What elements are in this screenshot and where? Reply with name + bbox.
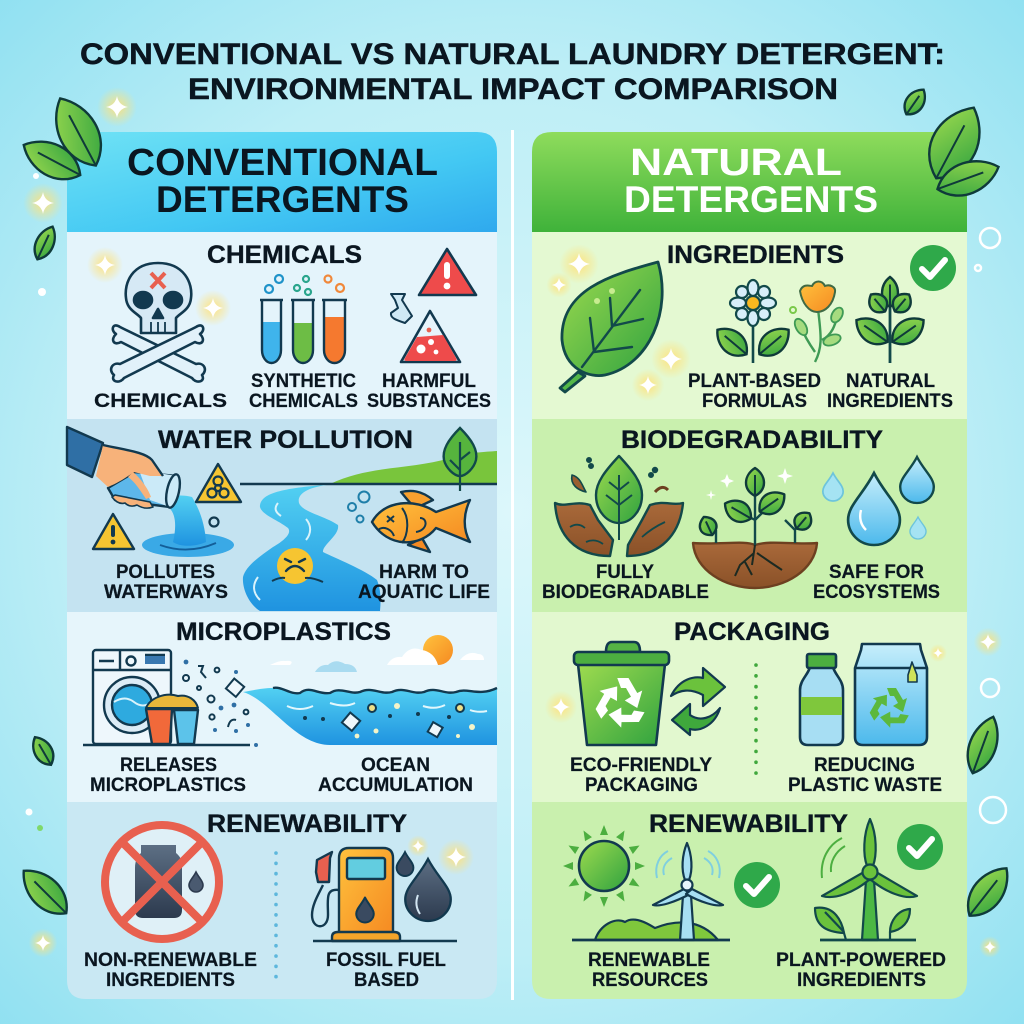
header: natural detergents: NATURAL (630, 142, 842, 184)
sparkles (546, 244, 691, 401)
label: eco-friendly packaging: PACKAGING (585, 775, 698, 796)
icon: biohazard sign (196, 464, 241, 502)
icon: recycling bin (574, 642, 669, 745)
label: pollutes waterways: WATERWAYS (104, 582, 228, 603)
label: ocean accumulation: OCEAN (361, 755, 430, 776)
label: natural ingredients (827, 371, 953, 412)
title: ENVIRONMENTAL IMPACT COMPARISON (188, 73, 838, 106)
heading: renewability: RENEWABILITY (649, 810, 848, 838)
label: non-renewable ingredients: NON-RENEWABLE (84, 950, 257, 971)
icon: no oil barrel (104, 824, 220, 940)
label: fully biodegradable: BIODEGRADABLE (542, 582, 709, 603)
label: eco-friendly packaging (570, 755, 712, 796)
label: harm to aquatic life: AQUATIC LIFE (358, 582, 490, 603)
icon: hill and wind turbine (572, 843, 730, 940)
icon: hand pouring detergent (67, 427, 182, 509)
label: plant-powered ingredients (776, 950, 946, 991)
section: water pollution (67, 426, 497, 611)
heading: biodegradability: BIODEGRADABILITY (621, 426, 883, 454)
header: natural detergents (532, 132, 967, 232)
header: natural detergents: DETERGENTS (624, 179, 878, 220)
section: renewability (conventional) (84, 810, 474, 991)
icon: flask (391, 294, 460, 362)
label: fully biodegradable: FULLY (596, 562, 654, 583)
icon: water drops (823, 457, 934, 545)
icon: carton with recycling symbol (855, 644, 927, 745)
heading: packaging: PACKAGING (674, 618, 830, 646)
header: conventional detergents: DETERGENTS (156, 179, 409, 220)
icon: sprout in soil (693, 468, 817, 588)
title: CONVENTIONAL VS NATURAL LAUNDRY DETERGENT: (80, 38, 945, 71)
label: natural ingredients: INGREDIENTS (827, 391, 953, 412)
label: eco-friendly packaging: ECO-FRIENDLY (570, 755, 712, 776)
icon: check (734, 862, 780, 908)
label: pollutes waterways: POLLUTES (116, 562, 215, 583)
heading: chemicals: CHEMICALS (207, 241, 362, 269)
label: non-renewable ingredients (84, 950, 257, 991)
icon: green plant (850, 277, 930, 363)
sparkles (87, 247, 231, 326)
icon: large leaf (560, 262, 662, 392)
dotted divider (754, 665, 758, 776)
label: harmful substances (367, 371, 491, 412)
icon: warning triangle (419, 249, 476, 295)
icon: dead fish (348, 491, 470, 552)
heading: water pollution: WATER POLLUTION (158, 426, 413, 454)
section: microplastics (83, 618, 497, 796)
icon: sad face (272, 548, 323, 584)
section: ingredients (546, 241, 956, 412)
label: synthetic chemicals (249, 371, 358, 412)
landscape: horizon, hill and tree (240, 428, 497, 491)
label: non-renewable ingredients: INGREDIENTS (106, 970, 235, 991)
icon: skull and crossbones (111, 263, 205, 382)
label: harmful substances: SUBSTANCES (367, 391, 491, 412)
label: fossil fuel based (326, 950, 446, 991)
icon: washing machine with baskets (83, 650, 250, 745)
label: safe for ecosystems: SAFE FOR (829, 562, 924, 583)
icon: green sun (563, 825, 645, 907)
icon: oil drops (397, 835, 474, 921)
icon: warning sign (93, 514, 134, 549)
panel background: natural (532, 232, 967, 999)
section: packaging (545, 618, 947, 796)
section: renewability (natural) (563, 810, 946, 991)
icon: plant-powered turbine (815, 819, 917, 940)
label: fossil fuel based: FOSSIL FUEL (326, 950, 446, 971)
icon: fuel pump (312, 848, 457, 941)
label: plant-based formulas (688, 371, 821, 412)
label: natural ingredients: NATURAL (846, 371, 935, 392)
icon: leaf breaking soil (555, 456, 683, 556)
label: plant-based formulas: FORMULAS (702, 391, 807, 412)
panel: conventional detergents (67, 132, 497, 999)
section: chemicals (87, 241, 491, 412)
label: renewable resources: RESOURCES (592, 970, 708, 991)
panel: natural detergents (532, 132, 967, 999)
icon: orange flower (790, 282, 845, 362)
icon: plastic bottle (800, 654, 843, 745)
label: renewable resources (588, 950, 710, 991)
section: biodegradability (542, 426, 940, 603)
icon: check (910, 245, 956, 291)
title (80, 38, 945, 106)
dotted divider (274, 853, 278, 977)
label: fossil fuel based: BASED (354, 970, 419, 991)
label: plant-powered ingredients: PLANT-POWERED (776, 950, 946, 971)
label: synthetic chemicals: SYNTHETIC (251, 371, 356, 392)
label: renewable resources: RENEWABLE (588, 950, 710, 971)
label: harm to aquatic life (358, 562, 490, 603)
label: safe for ecosystems: ECOSYSTEMS (813, 582, 940, 603)
label: safe for ecosystems (813, 562, 940, 603)
heading: microplastics: MICROPLASTICS (176, 618, 391, 646)
label: fully biodegradable (542, 562, 709, 603)
heading: ingredients: INGREDIENTS (667, 241, 844, 269)
label: ocean accumulation (318, 755, 473, 796)
label: synthetic chemicals: CHEMICALS (249, 391, 358, 412)
icon: recycling arrows (671, 668, 725, 735)
header: conventional detergents: CONVENTIONAL (127, 142, 438, 184)
label: reducing plastic waste: PLASTIC WASTE (788, 775, 942, 796)
icon: pouring water and puddle (142, 496, 234, 557)
icon: test tubes (260, 275, 347, 363)
label: releases microplastics: MICROPLASTICS (90, 775, 246, 796)
label: reducing plastic waste (788, 755, 942, 796)
icon: daisy (710, 280, 796, 363)
label: releases microplastics (90, 755, 246, 796)
label: plant-based formulas: PLANT-BASED (688, 371, 821, 392)
label: releases microplastics: RELEASES (120, 755, 217, 776)
label: harm to aquatic life: HARM TO (379, 562, 469, 583)
header: conventional detergents (67, 132, 497, 232)
label: harmful substances: HARMFUL (382, 371, 476, 392)
particles (183, 660, 258, 747)
icon: polluted river (243, 485, 381, 611)
center divider (511, 130, 514, 1000)
icon: check (897, 824, 943, 870)
icon: ocean with microplastics (243, 688, 497, 745)
panel background: conventional (67, 232, 497, 999)
sparkles (545, 644, 947, 723)
label: chemicals: CHEMICALS (94, 391, 227, 412)
icon: sun and clouds (270, 635, 484, 672)
decorative leaves and sparkles: left (14, 87, 137, 957)
label: reducing plastic waste: REDUCING (814, 755, 915, 776)
label: plant-powered ingredients: INGREDIENTS (797, 970, 926, 991)
heading: renewability: RENEWABILITY (207, 810, 407, 838)
decorative leaves and sparkles: right (899, 85, 1018, 958)
label: ocean accumulation: ACCUMULATION (318, 775, 473, 796)
label: pollutes waterways (104, 562, 228, 603)
